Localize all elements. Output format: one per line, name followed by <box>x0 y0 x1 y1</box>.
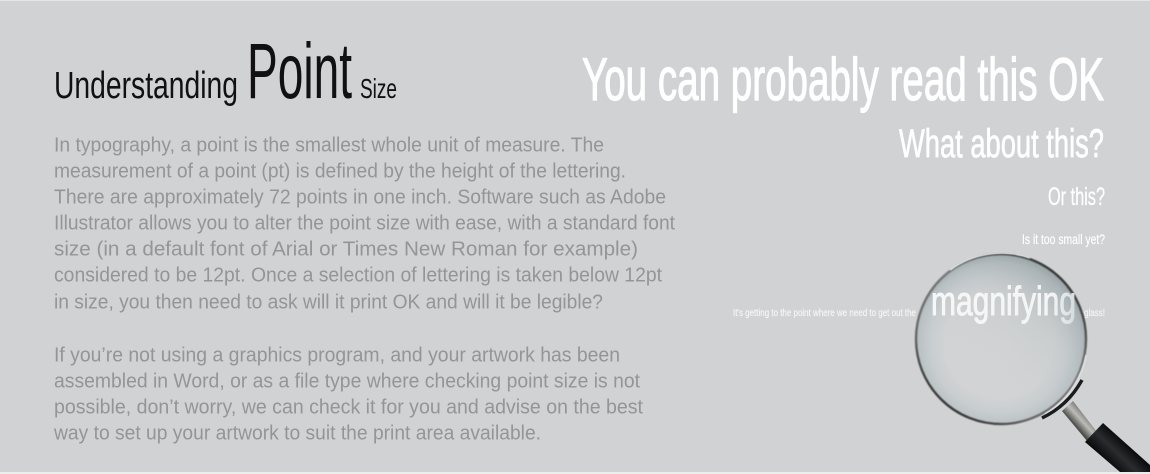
lower right rim highlight <box>1045 355 1086 414</box>
text: glass!: glass! <box>1084 308 1105 319</box>
title: Understanding Point Size <box>54 26 397 115</box>
body text block: first paragraph: In typography, a point is the smallest whole unit of measure. The <box>54 134 604 156</box>
magnifier handle ferrule <box>1062 401 1097 441</box>
body text block: first paragraph: size (in a default font of Arial or Times New Roman for example) <box>54 238 638 260</box>
lens shading <box>916 254 1086 424</box>
rim highlight <box>950 253 1030 270</box>
title word: Size: Size <box>360 73 397 104</box>
body text block: first paragraph: There are approximately 72 points in one inch. Software such as Adobe <box>54 186 666 208</box>
body text block: second paragraph: If you’re not using a graphics program, and your artwork has been <box>54 344 620 366</box>
bottom edge strip <box>0 472 1150 474</box>
body text block: first paragraph: Illustrator allows you to alter the point size with ease, with a standard font <box>54 212 675 234</box>
magnifier lens <box>916 254 1086 424</box>
magnifier rim <box>916 254 1086 424</box>
body text block: first paragraph: in size, you then need to ask will it print OK and will it be legible? <box>54 292 603 314</box>
body text block: second paragraph: way to set up your artwork to suit the print area available. <box>53 422 541 444</box>
title word: Understanding: Understanding <box>54 65 238 107</box>
lower right rim arc <box>1042 380 1082 418</box>
body text block: first paragraph: considered to be 12pt. Once a selection of lettering is taken below 12pt <box>54 264 662 286</box>
body text block: first paragraph <box>54 134 675 314</box>
icon: magnifying glass <box>916 253 1150 472</box>
text: It's getting to the point: It's getting to the point where we need to get out the <box>733 308 916 319</box>
body text block: second paragraph: assembled in Word, or as a file type where checking point size is not <box>54 370 640 392</box>
body text block: second paragraph: possible, don’t worry, we can check it for you and advise on the best <box>54 396 643 418</box>
magnified word: magnifying: magnifying <box>931 278 1076 324</box>
title word: Point: Point <box>247 26 352 115</box>
text: Is it too small yet?: Is it too small yet? <box>1022 231 1105 247</box>
magnifier handle grip <box>1085 423 1150 472</box>
text: Or this?: Or this? <box>1048 183 1105 211</box>
body text block: second paragraph <box>53 344 643 444</box>
body text block: first paragraph: measurement of a point (pt) is defined by the height of the lettering. <box>54 160 626 182</box>
